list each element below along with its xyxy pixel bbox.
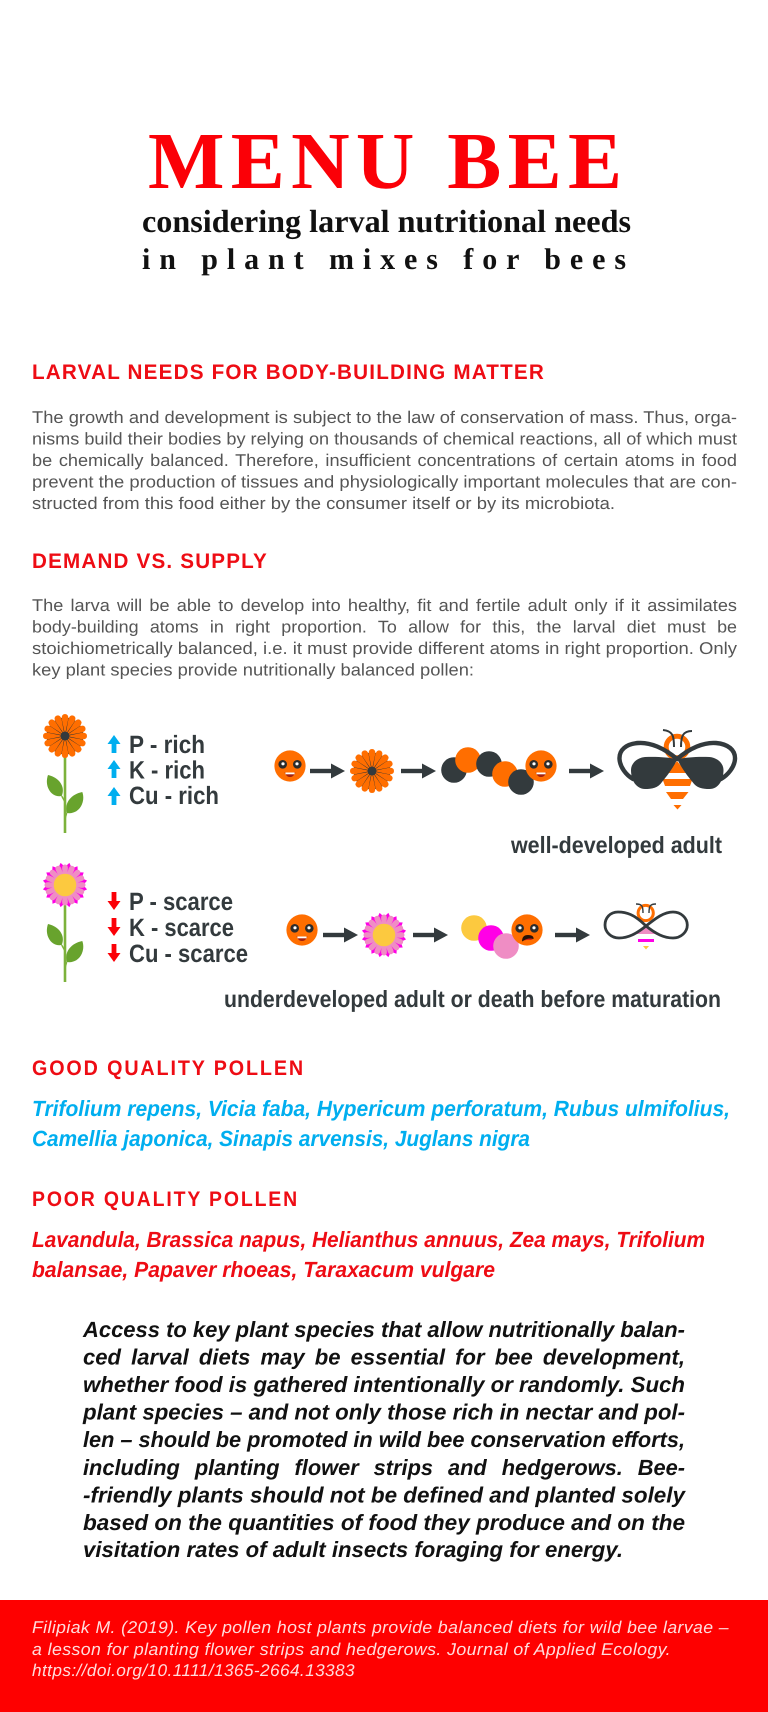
conclusion text block: whether food is gathered intentionally or randomly. Such [83,1372,685,1397]
text block: larval needs: prevent the production of tissues and physiologically important molecules that are con- [32,472,737,492]
icon: well-developed bee [619,730,735,810]
footer panel: citation: a lesson for planting flower strips and hedgerows. Journal of Applied Ecology. [32,1640,671,1659]
caption: well-developed adult: well-developed adult [510,832,722,858]
conclusion text block: based on the quantities of food they produce and on the [83,1510,685,1535]
heading: good quality pollen: GOOD QUALITY POLLEN [32,1057,305,1080]
scarce nutrient list [108,888,248,968]
icon: pink flower plant [42,862,88,982]
footer panel: citation: https://doi.org/10.1111/1365-2664.13383 [32,1661,355,1680]
footer panel: citation: Filipiak M. (2019). Key pollen host plants provide balanced diets for wild bee larvae – [32,1618,729,1637]
rich nutrient list [108,731,219,810]
icon: underdeveloped bee [605,904,687,950]
poor diet pathway [286,912,590,959]
good diet pathway [274,747,604,795]
title: MENU BEE [148,116,622,206]
footer panel: citation [0,1600,768,1712]
scarce nutrient list: K - scarce [129,914,234,942]
poor pollen species list [32,1227,705,1282]
text block: demand vs supply [32,596,738,680]
rich nutrient list: P - rich [129,731,205,759]
rich nutrient list: K - rich [129,756,205,784]
conclusion text block [82,1317,687,1562]
conclusion text block: visitation rates of adult insects foraging for energy. [83,1537,623,1562]
heading: larval needs: LARVAL NEEDS FOR BODY-BUILDING MATTER [32,361,545,384]
caption: underdeveloped adult: underdeveloped adult or death before maturation [224,986,721,1012]
text block: larval needs: be chemically balanced. Therefore, insufficient concentrations of certain atoms in food [32,451,737,470]
poor pollen species list: balansae, Papaver rhoeas, Taraxacum vulgare [32,1257,495,1282]
conclusion text block: -friendly plants should not be defined and planted solely [83,1482,687,1508]
text block: larval needs: The growth and development is subject to the law of conservation of mass. Thus, orga- [32,408,737,427]
conclusion text block: including planting flower strips and hedgerows. Bee- [83,1455,685,1480]
text block: larval needs: nisms build their bodies by relying on thousands of chemical reactions, all of which must [32,430,737,448]
heading: poor quality pollen: POOR QUALITY POLLEN [32,1188,299,1211]
scarce nutrient list: P - scarce [129,888,233,916]
text block: demand vs supply: key plant species provide nutritionally balanced pollen: [32,660,474,680]
text block: demand vs supply: stoichiometrically balanced, i.e. it must provide different atoms in right proportion. Only [32,639,738,658]
subtitle: in plant mixes for bees [142,243,626,276]
conclusion text block: Access to key plant species that allow nutritionally balan- [82,1317,685,1342]
heading: demand vs supply: DEMAND VS. SUPPLY [32,550,268,573]
rich nutrient list: Cu - rich [129,782,219,810]
poor pollen species list: Lavandula, Brassica napus, Helianthus annuus, Zea mays, Trifolium [32,1227,705,1252]
icon: orange flower plant [43,714,87,833]
good pollen species list [32,1096,730,1151]
scarce nutrient list: Cu - scarce [129,940,248,968]
text block: demand vs supply: body-building atoms in right proportion. To allow for this, the larval diet must be [32,618,737,636]
conclusion text block: ced larval diets may be essential for bee development, [83,1344,685,1370]
conclusion text block: len – should be promoted in wild bee conservation efforts, [83,1427,685,1452]
subtitle: considering larval nutritional needs [142,203,631,240]
subtitle [142,203,631,276]
conclusion text block: plant species – and not only those rich in nectar and pol- [82,1400,685,1424]
good pollen species list: Camellia japonica, Sinapis arvensis, Juglans nigra [32,1126,530,1151]
text block: larval needs: structed from this food either by the consumer itself or by its microbiota. [32,494,615,513]
good pollen species list: Trifolium repens, Vicia faba, Hypericum perforatum, Rubus ulmifolius, [32,1096,730,1121]
text block: demand vs supply: The larva will be able to develop into healthy, fit and fertile adult only if it assimilates [32,596,737,615]
text block: larval needs [32,408,737,513]
